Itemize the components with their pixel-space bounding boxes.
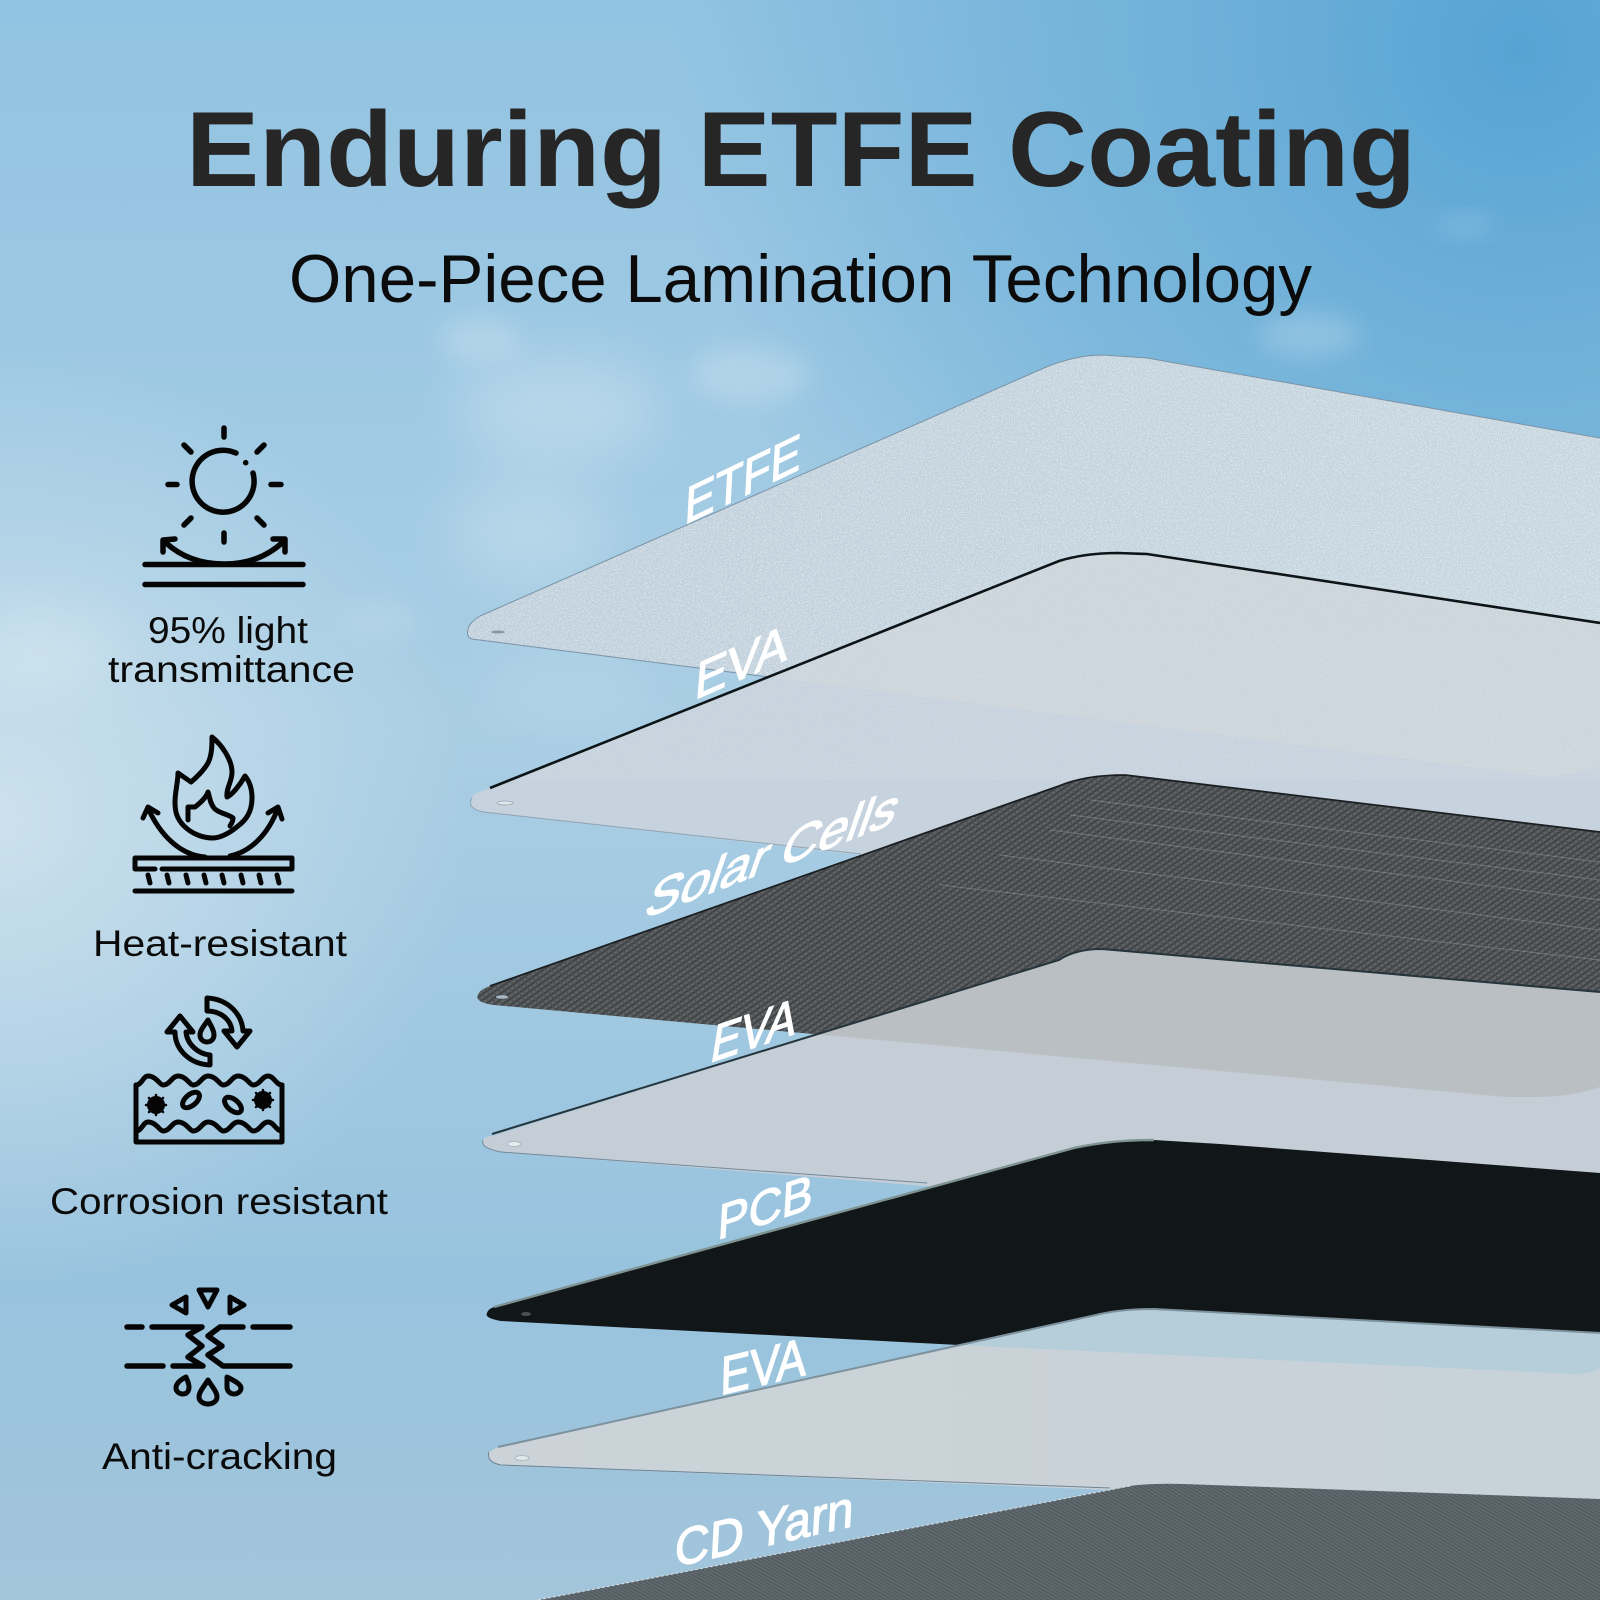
layer: CD Yarn	[538, 1484, 1600, 1600]
layer: ETFE	[467, 354, 1600, 677]
text: 95% light transmittance: 95% light	[148, 610, 309, 651]
layer: EVA lower	[488, 1308, 1600, 1499]
layer: EVA middle	[482, 948, 1600, 1186]
feature: anti-cracking	[102, 1290, 337, 1477]
layer: Solar Cells	[477, 775, 1600, 1097]
text: 95% light transmittance	[108, 610, 355, 690]
text: Anti-cracking: Anti-cracking	[102, 1436, 337, 1477]
icon: sun over surface	[145, 428, 303, 584]
label: PCB: PCB	[716, 1165, 815, 1251]
label: CD Yarn: CD Yarn	[673, 1479, 855, 1578]
feature: corrosion resistant	[50, 998, 389, 1222]
text: 95% light transmittance: transmittance	[108, 649, 355, 690]
label: EVA middle: EVA	[707, 985, 802, 1075]
text: Corrosion resistant: Corrosion resistant	[50, 1181, 389, 1222]
text: Heat-resistant: Heat-resistant	[93, 923, 348, 964]
label: Solar Cells: Solar Cells	[638, 775, 909, 930]
icon: flame over plate	[135, 737, 292, 891]
exploded layer stack	[460, 350, 1600, 1600]
label: ETFE: ETFE	[683, 421, 803, 536]
layer: EVA upper	[470, 552, 1600, 855]
icon: crack with fragments	[127, 1290, 290, 1404]
feature: heat-resistant	[93, 737, 348, 964]
title: Enduring ETFE Coating	[186, 89, 1416, 209]
icon: water cycle over corroded surface	[136, 998, 282, 1142]
layer labels	[638, 421, 909, 1578]
subtitle: One-Piece Lamination Technology	[289, 241, 1312, 317]
feature: light transmittance	[108, 428, 355, 690]
layer: PCB	[487, 1140, 1600, 1374]
label: EVA upper: EVA	[693, 614, 790, 712]
label: EVA lower: EVA	[720, 1326, 808, 1407]
